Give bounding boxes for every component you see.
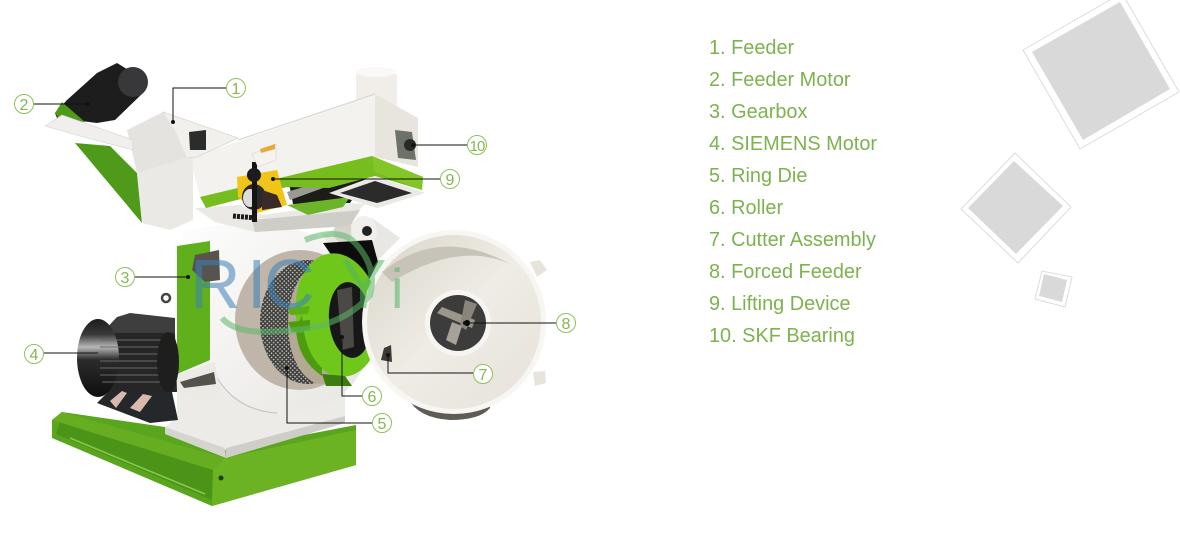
badge 1: 1 bbox=[232, 81, 241, 98]
badge 4 bbox=[24, 344, 44, 364]
feeder motor bbox=[45, 63, 148, 150]
parts list: 4. SIEMENS Motor bbox=[709, 133, 877, 155]
warning label bbox=[252, 144, 276, 167]
callout line 9 bbox=[273, 178, 440, 180]
parts list: 6. Roller bbox=[709, 197, 783, 219]
green die cover bbox=[288, 248, 388, 386]
long conveyor housing bbox=[190, 67, 425, 208]
badge 10: 10 bbox=[470, 138, 485, 155]
badge 10 bbox=[468, 136, 486, 155]
badge 5: 5 bbox=[378, 416, 387, 433]
badge 8: 8 bbox=[562, 316, 571, 333]
callout line 4 bbox=[44, 352, 98, 354]
RICHI watermark logo bbox=[190, 234, 403, 332]
parts list: 3. Gearbox bbox=[709, 101, 807, 123]
logo wordmark: I bbox=[247, 245, 266, 323]
badge 6 bbox=[362, 386, 382, 406]
callout anchor dots bbox=[86, 102, 467, 370]
badge 6: 6 bbox=[368, 389, 377, 406]
callout line 1 bbox=[173, 88, 226, 122]
bearing bbox=[395, 130, 416, 160]
callout line 10 bbox=[413, 144, 467, 146]
pellet mill machine illustration bbox=[45, 63, 547, 506]
badge 3 bbox=[116, 268, 134, 287]
diamond: medium bbox=[961, 153, 1071, 263]
parts list: 1. Feeder bbox=[709, 37, 794, 59]
callout line 6 bbox=[342, 337, 362, 396]
callout line 8 bbox=[465, 322, 556, 324]
gearbox plate bbox=[176, 241, 220, 402]
parts list: 9. Lifting Device bbox=[709, 293, 851, 315]
callout line 5 bbox=[287, 368, 372, 423]
diamond: small bbox=[1035, 271, 1072, 307]
badge 2: 2 bbox=[20, 97, 29, 114]
badge 2 bbox=[14, 94, 34, 114]
lifting device bbox=[233, 162, 287, 222]
RICHI watermark logo: i bbox=[391, 257, 403, 320]
callout line 7 bbox=[388, 355, 473, 373]
badge 9 bbox=[440, 170, 460, 189]
diamond: large bbox=[1023, 0, 1179, 149]
callout badges bbox=[14, 78, 576, 433]
badge 8 bbox=[556, 314, 576, 333]
parts list: 8. Forced Feeder bbox=[709, 261, 862, 283]
callout line 2 bbox=[34, 103, 88, 105]
lower frame under conveyor bbox=[195, 170, 372, 232]
decorative diamonds bbox=[961, 0, 1179, 307]
parts list: 2. Feeder Motor bbox=[709, 69, 851, 91]
badge 4: 4 bbox=[30, 347, 39, 364]
feeder hopper bbox=[75, 112, 238, 230]
callout line 3 bbox=[135, 276, 188, 278]
parts list: 10. SKF Bearing bbox=[709, 325, 855, 347]
logo wordmark: Y bbox=[340, 245, 387, 323]
ring die bbox=[235, 250, 365, 390]
callouts bbox=[34, 88, 556, 423]
SIEMENS motor bbox=[77, 294, 179, 423]
badge 3: 3 bbox=[121, 270, 130, 287]
badge 7 bbox=[474, 364, 492, 384]
logo wordmark: C bbox=[264, 245, 315, 323]
badge 1 bbox=[226, 78, 246, 98]
badge 5 bbox=[372, 414, 392, 433]
parts list bbox=[709, 37, 877, 347]
open door with forced feeder bbox=[362, 230, 547, 420]
parts list: 5. Ring Die bbox=[709, 165, 807, 187]
base frame bbox=[52, 412, 356, 506]
badge 7: 7 bbox=[479, 367, 488, 384]
logo wordmark: R bbox=[190, 245, 241, 323]
badge 9: 9 bbox=[446, 172, 455, 189]
main white body bbox=[165, 216, 400, 458]
logo swoosh bbox=[222, 234, 372, 332]
parts list: 7. Cutter Assembly bbox=[709, 229, 876, 251]
